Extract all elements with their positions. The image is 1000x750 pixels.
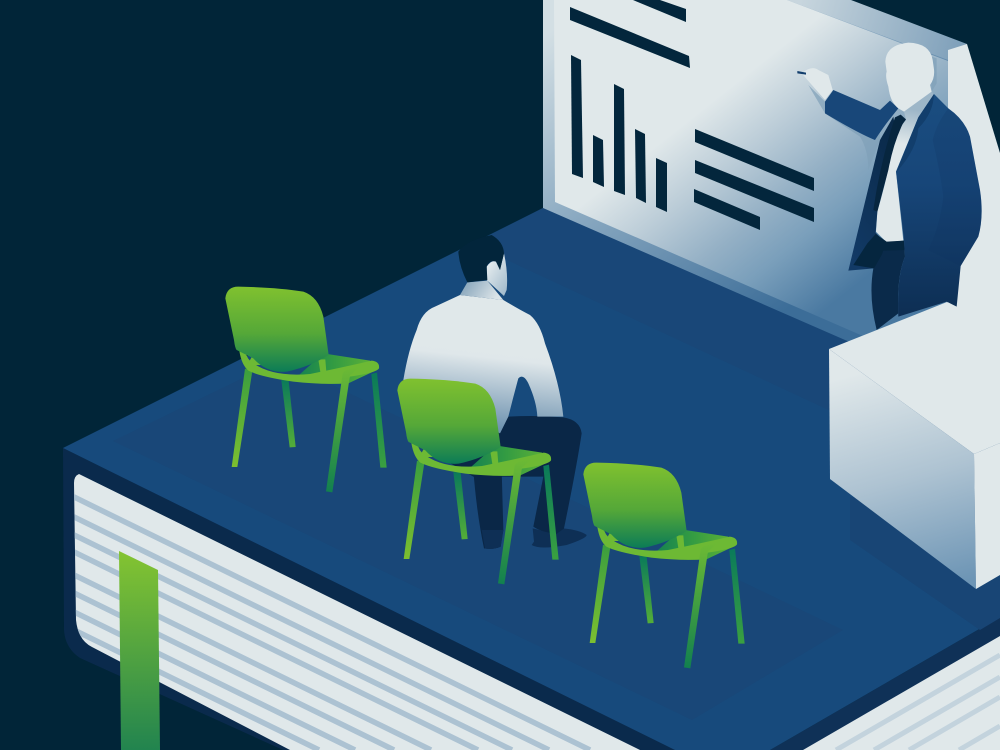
- book: page block, right side: [803, 636, 1000, 750]
- shirt: [876, 92, 934, 242]
- chair: back row: [225, 287, 387, 492]
- book: cover edge, left side: [63, 448, 680, 750]
- arm: [825, 90, 898, 140]
- lectern: [829, 302, 1000, 589]
- lectern left face: [829, 349, 976, 589]
- pocket: [853, 234, 887, 268]
- trousers: [871, 241, 905, 330]
- arm shadow on screen: [808, 85, 880, 170]
- lectern top: [829, 302, 1000, 454]
- chair: middle row: [397, 379, 559, 584]
- lapel: [897, 94, 934, 172]
- floor shadow: lectern: [850, 497, 1000, 630]
- screen frame: [543, 0, 948, 385]
- jacket fold: [928, 108, 982, 266]
- jacket right front: [896, 94, 982, 317]
- right wall: [948, 44, 1000, 345]
- left shoe: [482, 530, 503, 549]
- seated man: [403, 235, 587, 549]
- hair: [458, 235, 504, 282]
- bookmark ribbon: [119, 551, 160, 750]
- bar chart: [571, 55, 667, 212]
- belt: [883, 241, 904, 251]
- floor shadow: under the chairs: [113, 360, 843, 720]
- screen top edge: [787, 0, 967, 60]
- book: cover edge, right side: [770, 617, 1000, 750]
- right shoe: [532, 528, 587, 547]
- tie: [873, 115, 906, 212]
- shirt: [403, 295, 563, 433]
- marker pen: [797, 71, 806, 75]
- presentation screen: [543, 0, 967, 385]
- left shin: [473, 470, 503, 549]
- head shadow on screen: [930, 56, 937, 92]
- lectern right face: [974, 443, 1000, 589]
- legs: [433, 416, 582, 534]
- jacket left front: [848, 117, 895, 271]
- chair: front row: [583, 463, 745, 668]
- head: [885, 43, 934, 112]
- text lines: [694, 129, 814, 230]
- collar: [460, 281, 503, 300]
- screen surface: [554, 0, 948, 373]
- stage floor: book top: [63, 208, 1000, 750]
- face: [487, 253, 507, 296]
- presenter: [797, 43, 982, 330]
- floor shadow: along the screen: [480, 208, 850, 420]
- headline bars: [570, 0, 690, 68]
- hand: [802, 68, 833, 100]
- book: page block, left side: [70, 474, 640, 750]
